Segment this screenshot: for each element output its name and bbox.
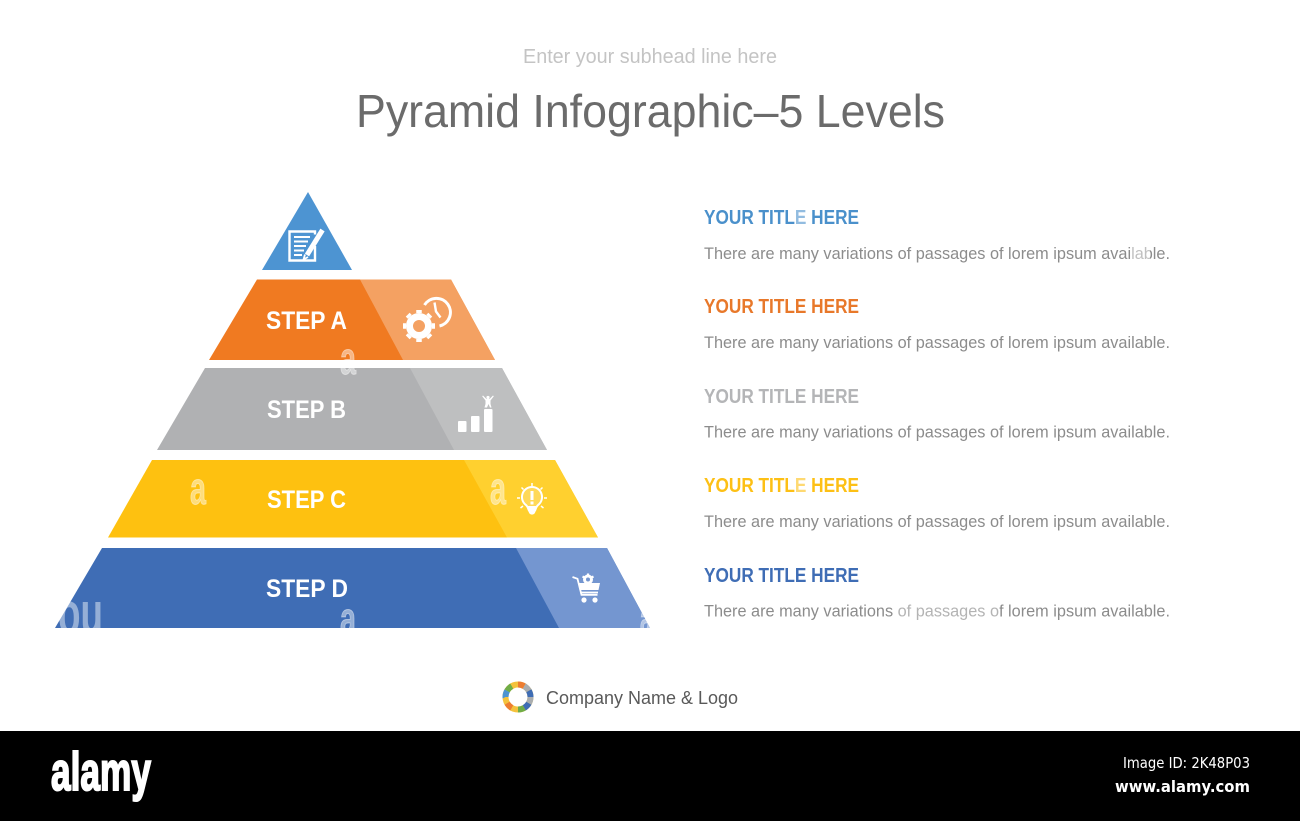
level: step D bbox=[55, 548, 650, 628]
label: step C: STEP C bbox=[267, 486, 346, 514]
pyramid chart bbox=[55, 192, 652, 647]
level: step B bbox=[157, 368, 547, 450]
label: step B: STEP B bbox=[267, 396, 346, 424]
text: a bbox=[640, 593, 652, 644]
icon: document and pencil bbox=[290, 230, 322, 260]
text block 1: YOUR TITLE HERE bbox=[704, 207, 859, 229]
text block 5: YOUR TITLE HERE bbox=[704, 565, 859, 587]
watermark fragments: a bbox=[340, 333, 357, 384]
text block 3: YOUR TITLE HERE bbox=[704, 386, 859, 408]
text block 4 bbox=[704, 475, 1170, 531]
icon: light bulb bbox=[517, 483, 547, 515]
watermark fragments: a bbox=[340, 593, 357, 644]
company name: Company Name & Logo bbox=[546, 687, 738, 708]
company logo bbox=[506, 684, 738, 710]
website: www.alamy.com bbox=[1115, 777, 1250, 796]
title: Pyramid Infographic–5 Levels bbox=[356, 85, 945, 137]
text block 5: There are many variations of passages of lorem ipsum available. bbox=[704, 602, 1170, 620]
footer band bbox=[0, 731, 1300, 821]
level: step C bbox=[108, 460, 598, 538]
text block 4: There are many variations of passages of lorem ipsum available. bbox=[704, 512, 1170, 531]
text block 3 bbox=[704, 386, 1170, 442]
watermark fragments: a bbox=[490, 463, 507, 514]
level: top triangle bbox=[262, 192, 352, 270]
text block 2 bbox=[704, 296, 1170, 352]
label: step D: STEP D bbox=[266, 575, 348, 603]
subhead: Enter your subhead line here bbox=[523, 46, 777, 68]
icon: gear and clock bbox=[403, 298, 450, 342]
watermark fragments bbox=[58, 333, 652, 647]
text block 2: There are many variations of passages of lorem ipsum available. bbox=[704, 333, 1170, 352]
icon: multicolour ring bbox=[506, 684, 530, 710]
label: step A: STEP A bbox=[266, 307, 347, 335]
text block 3: There are many variations of passages of lorem ipsum available. bbox=[704, 422, 1170, 442]
icon: shopping cart with gear bbox=[572, 574, 600, 603]
icon: rising bars with person bbox=[458, 396, 494, 432]
text block 5 bbox=[704, 565, 1170, 620]
text block 2: YOUR TITLE HERE bbox=[704, 296, 859, 318]
alamy wordmark: alamy bbox=[51, 742, 151, 802]
watermark fragments: a bbox=[190, 463, 207, 514]
text block 1: There are many variations of passages of lorem ipsum available. bbox=[704, 244, 1170, 263]
image id: Image ID: 2K48P03 bbox=[1123, 754, 1250, 772]
text block 4: YOUR TITLE HERE bbox=[704, 475, 859, 497]
level: step A bbox=[209, 280, 495, 360]
watermark fade over text bbox=[796, 210, 1150, 620]
text block 1 bbox=[704, 207, 1170, 263]
watermark fragments: ou bbox=[58, 580, 103, 647]
